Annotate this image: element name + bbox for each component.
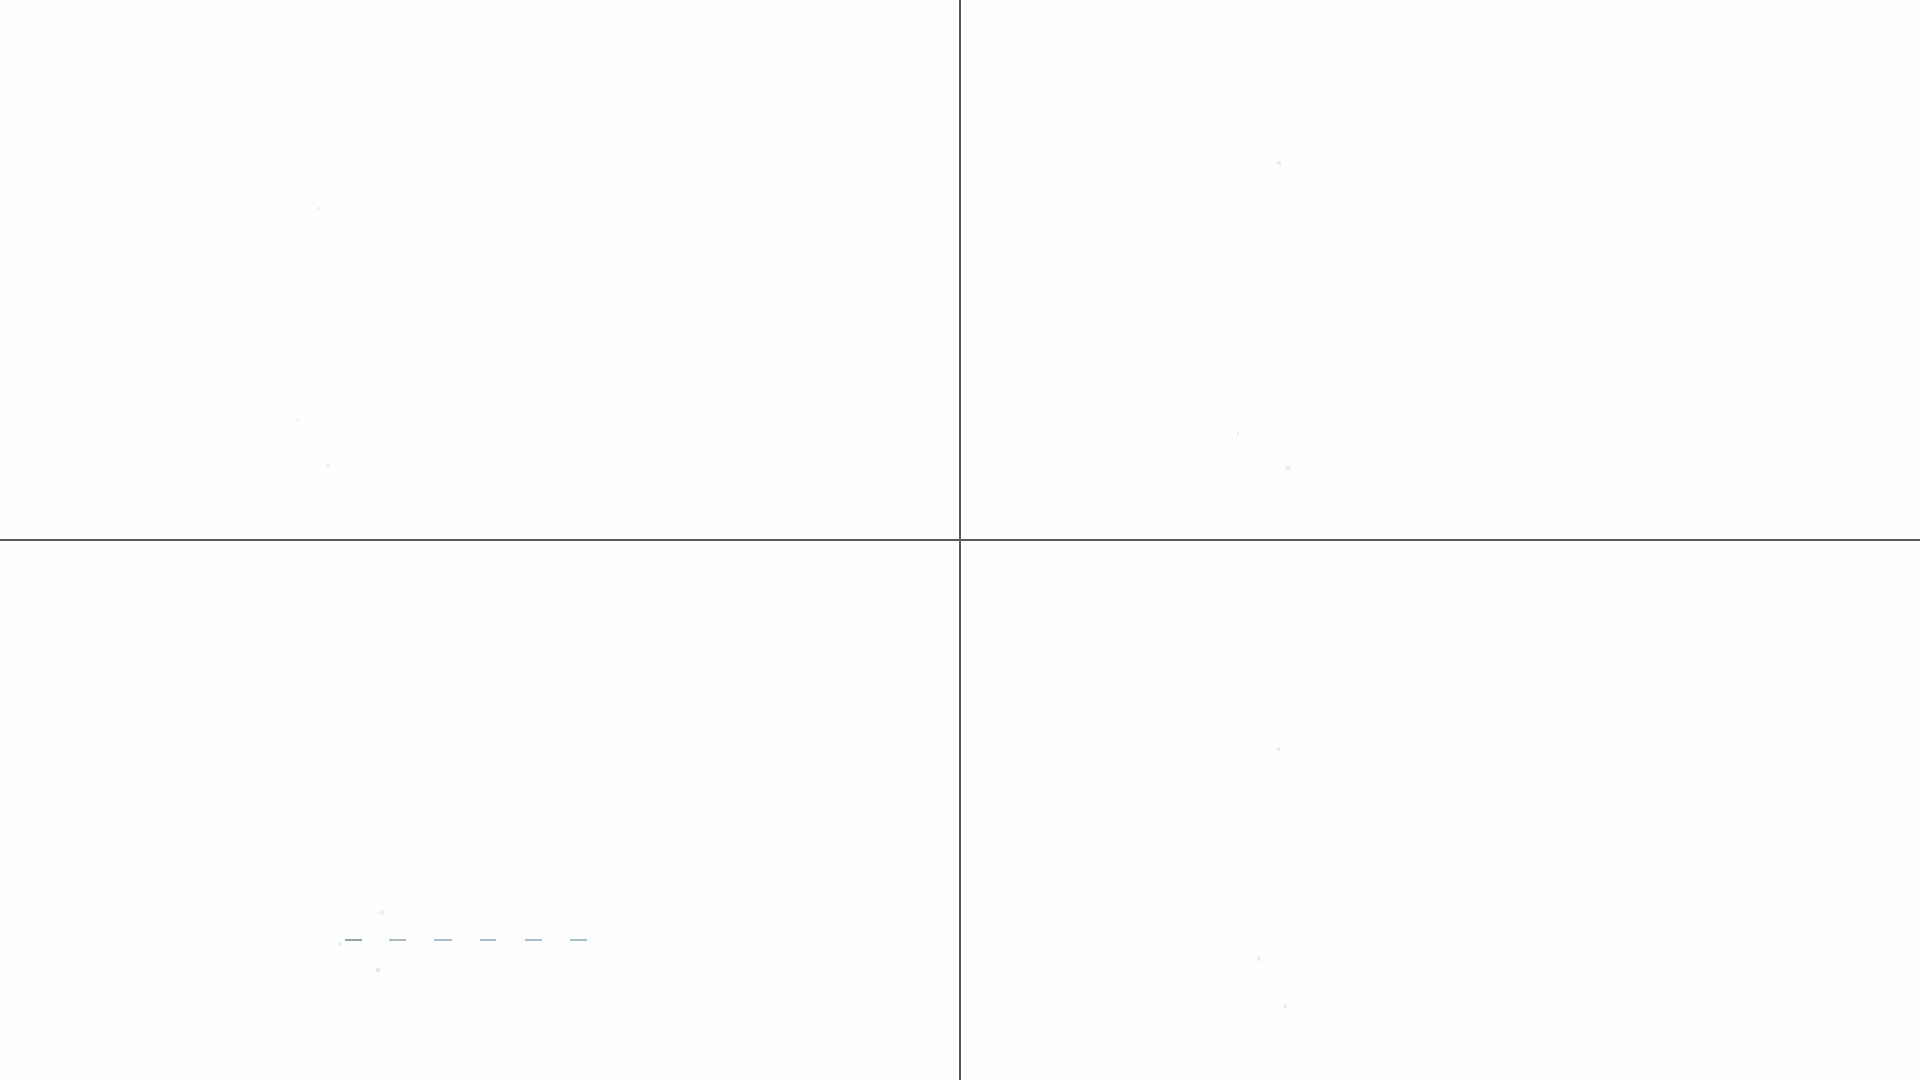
vertical divider bbox=[959, 0, 961, 1080]
panel: bottom-right faint marks bbox=[1257, 747, 1287, 1008]
panel: bottom-left dashes and marks bbox=[338, 910, 587, 972]
panel: top-left faint marks bbox=[296, 207, 330, 467]
horizontal divider bbox=[0, 539, 1920, 541]
panel: top-right faint marks bbox=[1237, 161, 1290, 470]
